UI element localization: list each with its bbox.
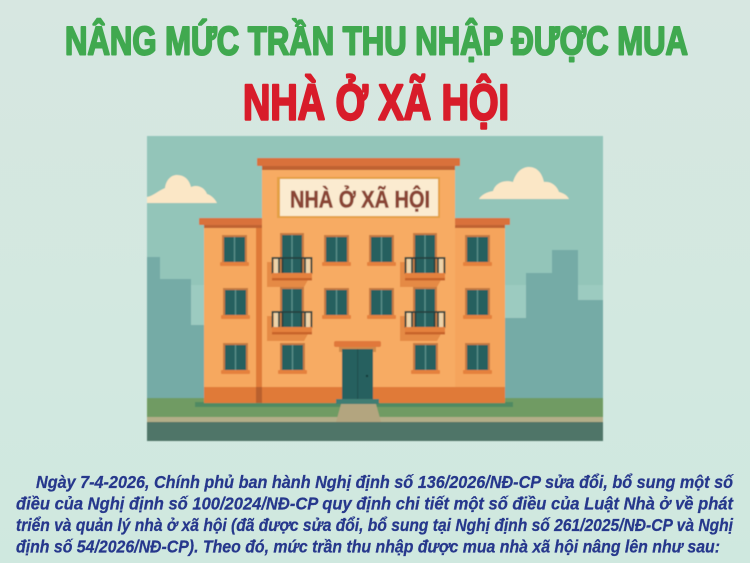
- cloud left: [147, 175, 217, 203]
- illustration: social housing building: [147, 136, 603, 441]
- right wing: [455, 222, 505, 403]
- heading line 2: NHÀ Ở XÃ HỘI: [243, 74, 509, 130]
- sign: [277, 177, 440, 218]
- windows: [220, 235, 492, 374]
- entrance door: [334, 341, 381, 404]
- central block: [262, 166, 455, 403]
- sign: NHÀ Ở XÃ HỘI: [290, 184, 430, 214]
- left wing: [204, 222, 262, 403]
- title: [65, 18, 688, 130]
- building: [199, 158, 510, 404]
- intro paragraph: [16, 472, 734, 556]
- ground: grass, sidewalk, road: [147, 398, 603, 441]
- sky: [147, 136, 603, 441]
- balconies: [267, 233, 445, 341]
- cloud right: [479, 167, 569, 199]
- roof: [257, 158, 460, 166]
- base band: [204, 387, 505, 403]
- background city buildings: [147, 250, 603, 400]
